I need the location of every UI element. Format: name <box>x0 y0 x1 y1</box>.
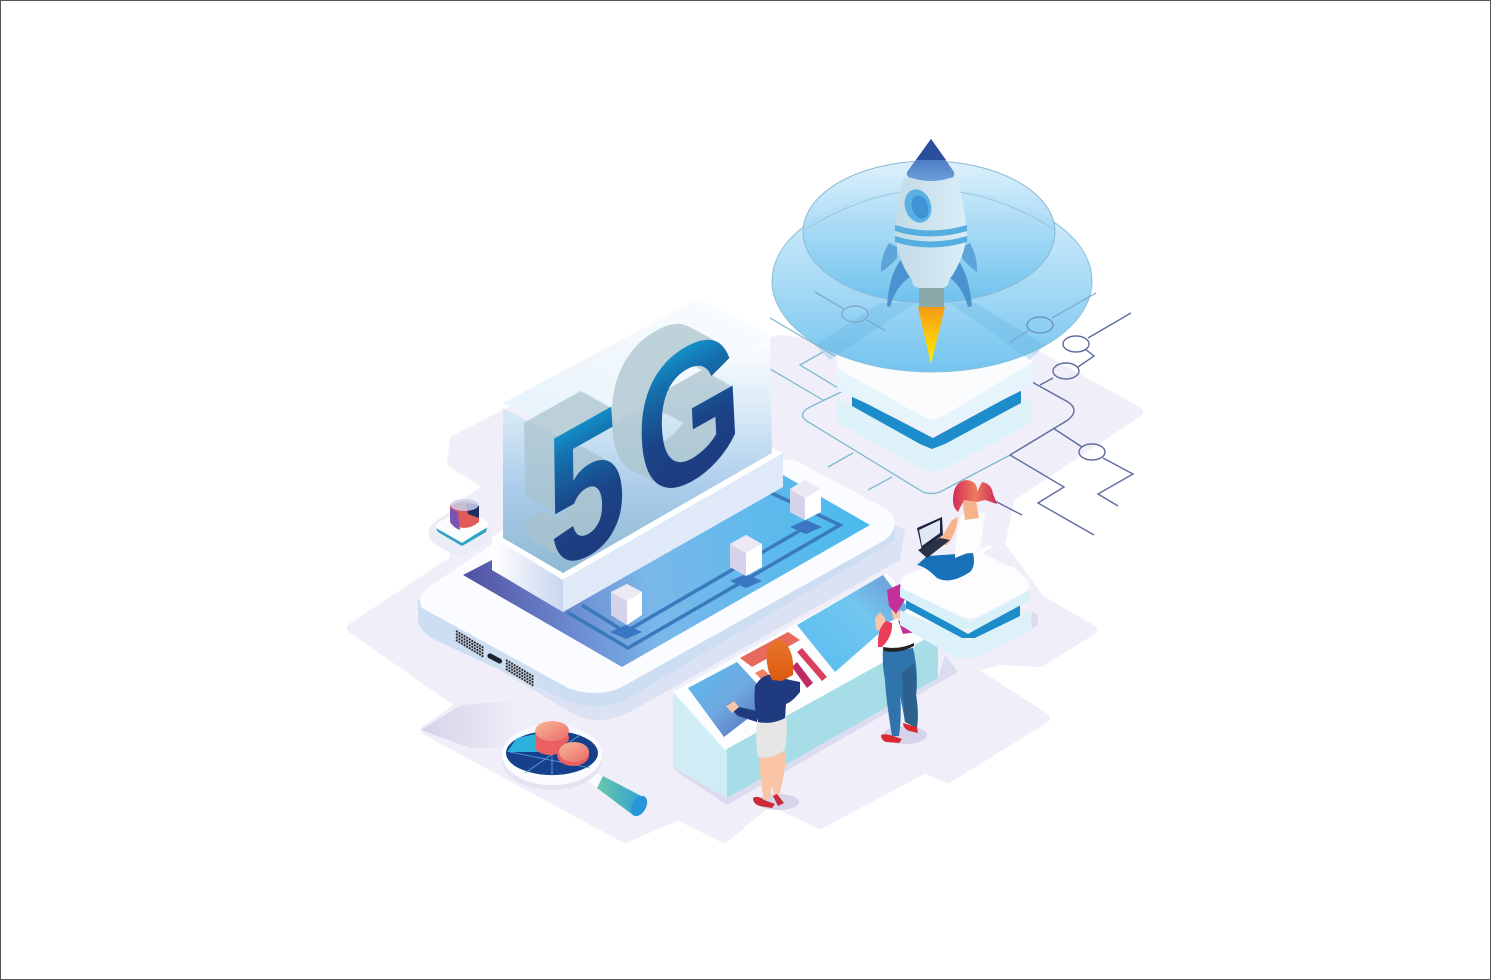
kiosk top <box>673 573 938 750</box>
phone speaker right <box>506 660 534 686</box>
hair <box>887 584 917 634</box>
hand <box>875 612 885 630</box>
heading: 5G <box>542 280 746 614</box>
phone side <box>418 518 895 707</box>
hair <box>767 640 793 681</box>
shoes <box>881 723 918 743</box>
shoe shadow <box>883 726 927 744</box>
seat cushion mark <box>983 547 1017 567</box>
phone pads <box>610 520 822 639</box>
sleeve <box>878 621 892 647</box>
kiosk shadow <box>673 655 958 805</box>
kiosk chart <box>740 632 827 688</box>
signal discs <box>772 161 1096 372</box>
person: standing woman right <box>875 584 927 744</box>
cube 3 <box>790 480 821 520</box>
5G block base <box>492 448 783 612</box>
rocket window <box>900 186 936 226</box>
phone circuit <box>567 490 840 648</box>
rocket nozzle <box>919 288 944 307</box>
kiosk front face <box>727 630 938 798</box>
magnifier ring <box>502 730 602 790</box>
rocket flame <box>918 307 945 364</box>
chart pad shadow <box>428 505 490 556</box>
shirt <box>882 618 915 651</box>
phone shadow <box>425 525 905 720</box>
tower platform <box>837 345 1033 473</box>
floor notch shadow <box>421 700 520 748</box>
icon: rocket <box>881 139 977 364</box>
seat top <box>900 545 1029 618</box>
magnifier neck <box>586 772 608 790</box>
radar coins <box>535 721 589 766</box>
shoe shadow <box>757 794 799 810</box>
platform blue band <box>852 390 1021 449</box>
rocket nose <box>907 139 954 181</box>
circuit lines: navy <box>993 313 1133 535</box>
phone top surface <box>420 460 895 693</box>
hair <box>953 480 997 512</box>
icon: magnifier radar <box>502 721 651 819</box>
kiosk left face <box>673 692 727 798</box>
circuit lines: teal <box>760 318 1010 494</box>
cube 1 <box>611 584 642 625</box>
legs <box>760 752 786 800</box>
laptop screen <box>917 517 943 550</box>
torso <box>955 512 985 558</box>
seat shadow <box>975 612 1038 660</box>
rocket stripes <box>895 225 967 248</box>
seat top side <box>900 586 1030 630</box>
5G glass box <box>503 299 772 573</box>
phone port <box>487 652 503 664</box>
skirt <box>756 712 787 758</box>
chart pad band <box>436 527 487 546</box>
rocket body <box>895 178 967 288</box>
neck <box>891 610 903 624</box>
seat blue band <box>906 598 1020 638</box>
phone speaker left <box>456 631 484 657</box>
trousers <box>883 644 918 736</box>
person: standing woman left <box>726 640 800 810</box>
platform upper tier <box>837 355 1033 433</box>
server cubes <box>611 480 821 625</box>
platform lower tier <box>837 398 1032 473</box>
chart pad <box>436 508 488 542</box>
heading: 5G: G <box>631 280 746 548</box>
belt <box>883 643 914 652</box>
heading: 5G: 5 <box>542 361 630 614</box>
person: seated woman with laptop <box>917 480 997 580</box>
kiosk left screen <box>688 662 772 737</box>
arm <box>926 517 958 545</box>
kiosk right screen <box>797 575 908 672</box>
seated platform <box>900 545 1038 660</box>
kiosk display <box>673 573 958 805</box>
laptop base <box>918 538 950 558</box>
neck and face <box>962 498 979 520</box>
magnifier handle <box>597 776 645 815</box>
jacket <box>754 675 800 723</box>
cube 2 <box>730 535 762 576</box>
phone screen <box>463 475 870 667</box>
icon: pie chart on small platform <box>428 499 490 556</box>
phone <box>418 460 905 720</box>
rocket fins <box>881 243 977 272</box>
seat lower tier <box>900 610 1032 658</box>
shoes <box>753 794 784 808</box>
arm <box>727 701 757 722</box>
floor shapes <box>352 340 1138 838</box>
radar <box>506 731 598 775</box>
chart cylinder <box>450 502 479 528</box>
skirt <box>917 553 974 580</box>
